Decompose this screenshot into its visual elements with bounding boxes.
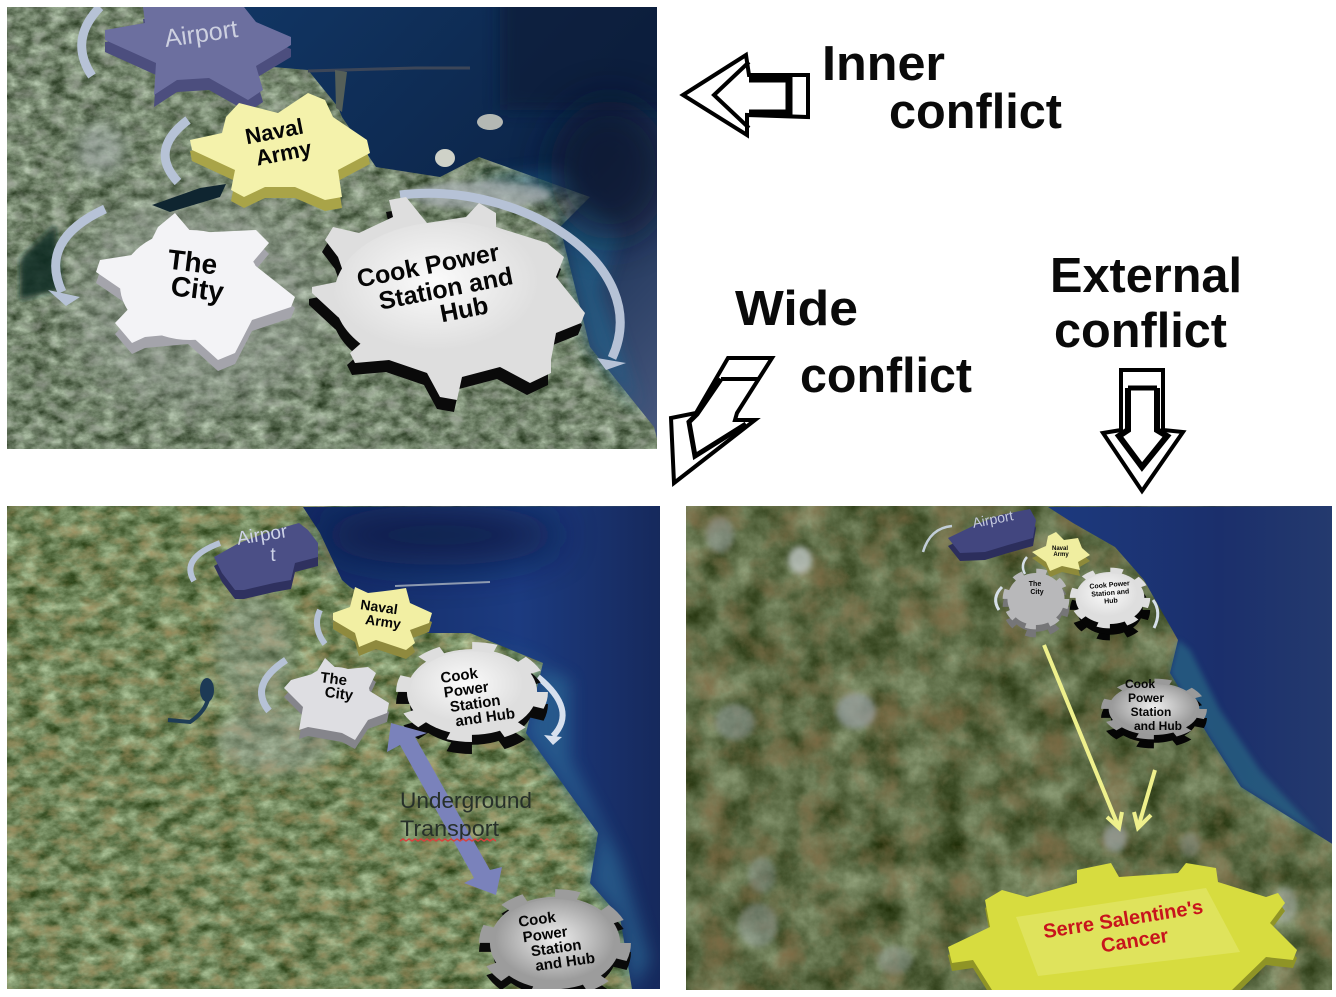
arrow: power station rotation [1153, 600, 1158, 628]
label: The City: City [324, 684, 355, 704]
label: Airport: Airpor [235, 521, 289, 550]
gear: Naval Army [1032, 532, 1090, 577]
label: Cook Power Station and Hub: Power [443, 679, 490, 702]
label: Cook Power Station and Hub: Hub [1104, 597, 1118, 606]
label: Cook Power Station and Hub [1089, 580, 1132, 607]
label: Cook Power Station and Hub: Cook [1125, 677, 1155, 691]
label: Airport: t [270, 545, 276, 566]
label: Cook Power Station and Hub: Station and [1091, 588, 1130, 599]
label: Serre Salentine's Cancer: Serre Salentine's [1042, 896, 1205, 943]
label: The City: City [169, 270, 226, 308]
label: The City [1029, 581, 1044, 596]
label: Wide conflict [735, 282, 972, 403]
arrow: yellow from far hub to Serre [1134, 770, 1155, 828]
label: Airport [238, 527, 286, 561]
label: Inner conflict: conflict [889, 85, 1062, 139]
arrow: airport rotation [82, 7, 100, 76]
label: Cook Power Station and Hub: and Hub [454, 705, 516, 730]
arrow: airport rotation [923, 526, 952, 552]
label: The City: The [319, 669, 348, 689]
label: Cook Power Station and Hub: Hub [438, 291, 491, 328]
label: Naval Army: Naval [360, 596, 399, 617]
arrow: naval army rotation [165, 120, 188, 182]
label: The City [169, 249, 224, 306]
label: Cook Power Station and Hub: Cook [517, 909, 557, 931]
label: Cook Power Station and Hub [518, 912, 594, 971]
gear: Cook Power Station and Hub [309, 197, 585, 412]
gear: Airport [105, 7, 291, 112]
label: Naval Army: Army [254, 135, 314, 171]
gear: Cook Power Station and Hub (far) [487, 895, 623, 997]
arrow: underground transport double arrow [387, 723, 502, 895]
gear: Cook Power Station and Hub (far) [1106, 677, 1202, 745]
panel: wide conflict map [7, 505, 662, 997]
satellite base: land and sea [7, 0, 680, 450]
gear: Naval Army [190, 93, 370, 211]
gear: Cook Power Station and Hub (near) [1074, 571, 1146, 637]
label: Cook Power Station and Hub: Station [449, 692, 502, 716]
gear: The City [1006, 572, 1066, 634]
label: Airport: Airport [163, 15, 240, 53]
text: Underground Transport [400, 788, 532, 841]
label: Cook Power Station and Hub: Station [1131, 705, 1171, 719]
label: The City: The [1029, 581, 1041, 588]
gear: The City [96, 213, 295, 371]
label: The City [321, 672, 354, 703]
label: Wide conflict: conflict [800, 349, 972, 403]
text: Underground Transport: Underground [400, 788, 532, 813]
label: External conflict: External [1050, 249, 1242, 303]
label: Cook Power Station and Hub: and Hub [1134, 719, 1182, 733]
arrow: external conflict [1103, 370, 1183, 491]
arrow: inner conflict [683, 55, 808, 135]
arrow: naval rotation [1023, 557, 1027, 574]
panel: inner conflict map [7, 0, 680, 450]
label: Naval Army: Naval [243, 114, 305, 149]
label: Cook Power Station and Hub: Station [530, 936, 583, 960]
label: Serre Salentine's Cancer [1042, 896, 1208, 966]
label: The City: The [166, 244, 219, 281]
satellite base: land and sea [7, 505, 662, 989]
label: Cook Power Station and Hub: Power [1128, 691, 1164, 705]
label: Cook Power Station and Hub [358, 247, 513, 322]
arrow: yellow from inner hub to Serre [1044, 645, 1122, 828]
label: External conflict: conflict [1054, 304, 1227, 358]
gear: Airport [214, 521, 318, 599]
label: Wide conflict: Wide [735, 282, 858, 336]
arrow: city rotation [262, 660, 286, 711]
label: Cook Power Station and Hub: Station and [376, 262, 515, 316]
label: Cook Power Station and Hub: Cook Power [1089, 580, 1130, 591]
label: Inner conflict [822, 37, 1062, 139]
satellite base: land and sea [686, 506, 1334, 990]
panel: external conflict map [686, 506, 1334, 997]
label: Serre Salentine's Cancer: Cancer [1099, 925, 1170, 957]
label: Cook Power Station and Hub: Cook Power [355, 238, 502, 293]
label: Naval Army: Army [1053, 552, 1069, 558]
arrow: city rotation [996, 587, 1002, 610]
gear: Airport [948, 507, 1036, 561]
arrow: city rotation [48, 209, 105, 306]
arrow: power station rotation [538, 677, 563, 745]
arrow: wide conflict [671, 358, 772, 483]
arrow: airport rotation [190, 543, 220, 581]
label: Cook Power Station and Hub: Power [522, 923, 569, 946]
label: Cook Power Station and Hub: Cook [439, 665, 480, 687]
gear: Cook Power Station and Hub (near) [404, 647, 540, 749]
label: Naval Army [360, 600, 401, 631]
text: Underground Transport: Transport [400, 816, 499, 841]
label: Cook Power Station and Hub [1125, 677, 1182, 733]
label: Naval Army: Naval [1052, 546, 1068, 552]
gear: Serre Salentine's Cancer [948, 863, 1297, 997]
gear: Naval Army [333, 587, 432, 659]
label: Naval Army: Army [364, 611, 402, 632]
gear: The City [284, 658, 389, 749]
label: Cook Power Station and Hub [441, 668, 514, 726]
label: Airport: Airport [971, 507, 1015, 531]
label: Inner conflict: Inner [822, 37, 945, 91]
label: Naval Army [245, 118, 310, 166]
label: Naval Army [1052, 546, 1069, 558]
arrow: naval army rotation [317, 610, 325, 644]
label: The City: City [1030, 589, 1044, 596]
label: Cook Power Station and Hub: and Hub [534, 950, 596, 975]
arrow: power station rotation [400, 193, 626, 370]
label: External conflict [1050, 249, 1242, 358]
